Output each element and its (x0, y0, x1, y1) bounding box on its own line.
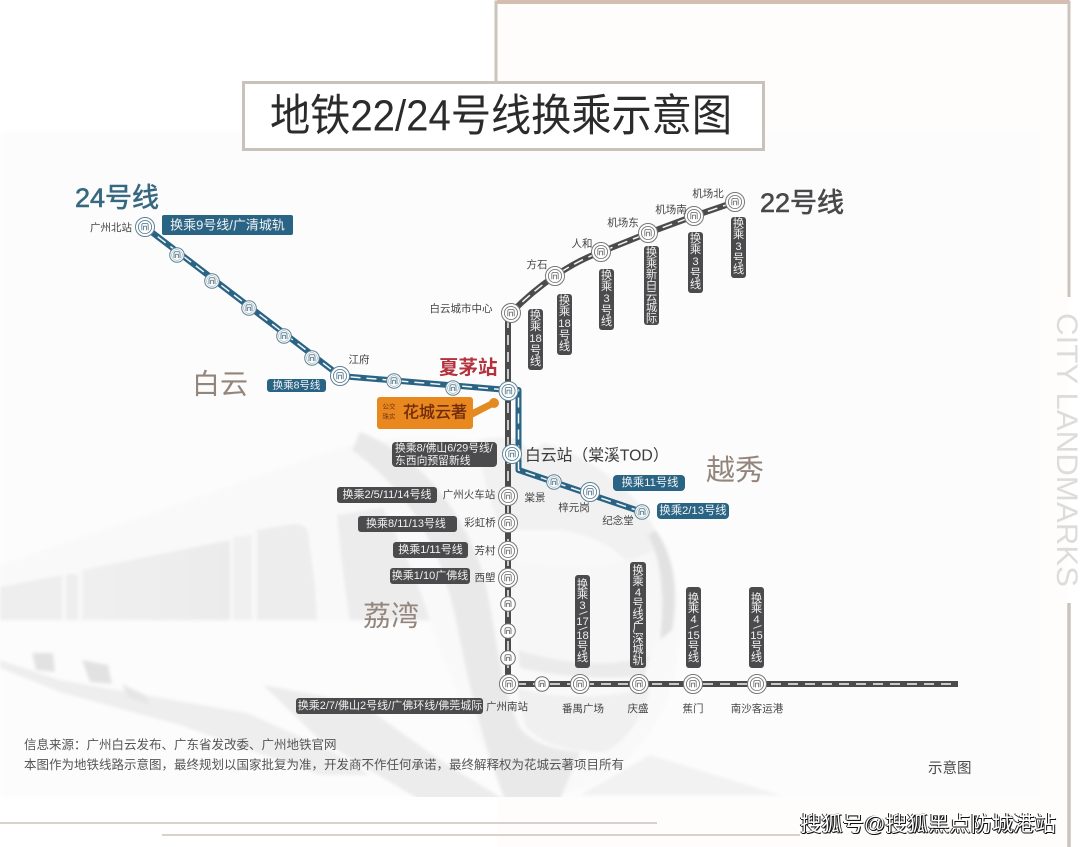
line 22 heading: 22号线 (760, 188, 844, 218)
grey horizontal transfer tags: 换乘1/10广佛线 (392, 568, 468, 582)
vertical transfer tags: line 22 north: 际 (646, 312, 657, 325)
station names: 白云城市中心 (430, 302, 493, 315)
vertical transfer tags: line 22 south: 线 (577, 650, 588, 664)
vertical transfer tags: line 22 south: 4 (635, 587, 641, 599)
grey horizontal transfer tags: 换乘2/7/佛山2号线/广佛环线/佛莞城际 (298, 698, 482, 712)
vertical transfer tags: line 22 south: 轨 (632, 653, 644, 667)
vertical transfer tags: line 22 north: 18 (558, 318, 571, 330)
grey horizontal transfer tags (296, 440, 497, 714)
background train illustration (0, 425, 780, 800)
station names: 广州北站 (90, 221, 132, 234)
vertical transfer tags: line 22 south: 17 (576, 616, 589, 628)
watermark: 搜狐号@搜狐黑点防城港站 (800, 812, 1056, 836)
line 24 stations (136, 218, 649, 519)
vertical transfer tags: line 22 south: 号 (577, 640, 588, 653)
vertical transfer tags: line 22 south: 线 (632, 607, 644, 621)
vertical transfer tags: line 22 north: 18 (529, 333, 542, 345)
station names: 纪念堂 (602, 514, 634, 527)
vertical transfer tags: line 22 south: 乘 (632, 574, 644, 588)
vertical transfer tags: line 22 south: 号 (632, 597, 644, 610)
source notes: 本图作为地铁线路示意图，最终规划以国家批复为准，开发商不作任何承诺，最终解释权为花城云著项目所有 (24, 757, 624, 772)
project marker: 花城云著 (403, 404, 467, 422)
project marker: 公交 (382, 402, 396, 410)
vertical transfer tags: line 22 north: 3 (603, 293, 610, 305)
grey horizontal transfer tags: 换乘2/5/11/14号线 (342, 487, 432, 501)
grey horizontal transfer tags: 换乘1/11号线 (398, 542, 463, 556)
teal transfer tags: 换乘11号线 (622, 475, 678, 489)
station names: 江府 (348, 353, 370, 366)
district labels: 越秀 (706, 454, 764, 487)
station names: 棠景 (524, 491, 546, 504)
grey horizontal transfer tags: 换乘8/11/13号线 (366, 516, 446, 530)
vertical transfer tags: line 22 north: 线 (559, 339, 570, 353)
vertical transfer tags: line 22 north: 号 (733, 252, 744, 265)
vertical transfer tags: line 22 south: / (577, 609, 589, 619)
project marker: 珠实 (382, 412, 396, 420)
grey horizontal transfer tags: 换乘8/佛山6/29号线/ (395, 440, 493, 454)
schematic note: 示意图 (928, 759, 972, 777)
station names: 芳村 (474, 544, 496, 557)
vertical transfer tags: line 22 south: / (751, 623, 763, 633)
grey horizontal transfer tags: 东西向预留新线 (395, 453, 471, 467)
vertical transfer tags: line 22 north: 3 (692, 256, 699, 268)
vertical transfer tags: line 22 north: 乘 (530, 319, 541, 333)
vertical transfer tags: line 22 south: 18 (576, 630, 589, 642)
vertical transfer tags: line 22 south: 15 (750, 630, 763, 642)
station names: 蕉门 (682, 702, 704, 715)
district labels: 白云 (192, 368, 248, 400)
vertical transfer tags: line 22 north: 号 (601, 304, 612, 317)
vertical transfer tags: line 22 south: 深 (632, 631, 644, 645)
vertical transfer tags: line 22 north: 乘 (690, 242, 701, 256)
vertical transfer tags: line 22 south: 换 (751, 593, 762, 605)
vertical transfer tags: line 22 south: 4 (690, 614, 697, 626)
line 22 track (508, 202, 958, 684)
vertical transfer tags: line 22 south: 换 (688, 593, 699, 605)
vertical transfer tags: line 22 north: 白 (646, 278, 657, 292)
vertical transfer tags: line 22 south: 15 (687, 630, 700, 642)
district labels: 荔湾 (363, 600, 419, 632)
Xiamao station label: 夏茅站 (439, 357, 498, 379)
station names: 广州火车站 (443, 488, 496, 501)
station names: 机场南 (655, 203, 687, 216)
vertical transfer tags: line 22 north: 乘 (646, 256, 657, 270)
vertical transfer tags: line 22 south: 4 (753, 614, 760, 626)
vertical transfer tags: line 22 north: 号 (690, 267, 701, 280)
interchange stations (499, 382, 522, 464)
title box (244, 82, 764, 150)
station names: 梓元岗 (558, 501, 590, 514)
vertical transfer tags: line 22 south: 换 (632, 565, 644, 577)
vertical transfer tags: line 22 north: 换 (646, 247, 657, 259)
line 22 stations (498, 192, 766, 694)
vertical transfer tags: line 22 north: 线 (530, 354, 541, 368)
vertical transfer tags: line 22 north: 3 (735, 241, 742, 253)
vertical transfer tags: line 22 south: / (632, 617, 644, 627)
title box: 地铁22/24号线换乘示意图 (270, 92, 732, 140)
vertical transfer tags: line 22 north: 换 (559, 295, 570, 307)
teal transfer tags: 换乘9号线/广清城轨 (170, 218, 285, 232)
vertical transfer tags: line 22 south (575, 562, 764, 668)
vertical transfer tags: line 22 north (528, 216, 746, 370)
station names: 机场北 (692, 187, 724, 200)
source notes (24, 737, 624, 772)
vertical transfer tags: line 22 north: 乘 (601, 279, 612, 293)
line 24 track (145, 227, 642, 512)
station names: 机场东 (607, 216, 639, 229)
vertical transfer tags: line 22 south: 换 (577, 579, 588, 591)
vertical transfer tags: line 22 north: 乘 (559, 304, 570, 318)
source notes: 信息来源：广州白云发布、广东省发改委、广州地铁官网 (24, 737, 337, 752)
station names: 西塱 (474, 571, 496, 584)
vertical transfer tags: line 22 north: 换 (601, 270, 612, 282)
vertical transfer tags: line 22 south: 广 (632, 621, 644, 634)
vertical transfer tags: line 22 north: 线 (601, 314, 612, 328)
project marker (377, 397, 499, 429)
station names (90, 187, 784, 715)
vertical transfer tags: line 22 north: 城 (646, 301, 657, 314)
vertical transfer tags: line 22 south: 乘 (688, 601, 699, 615)
vertical transfer tags: line 22 north: 换 (530, 310, 541, 322)
vertical transfer tags: line 22 south: 乘 (751, 601, 762, 615)
vertical transfer tags: line 22 south: 号 (751, 640, 762, 653)
district labels (192, 368, 764, 632)
teal transfer tags (162, 215, 729, 519)
vertical transfer tags: line 22 north: 乘 (733, 227, 744, 241)
vertical transfer tags: line 22 north: 换 (733, 218, 744, 230)
teal transfer tags: 换乘2/13号线 (659, 503, 727, 517)
station names: 庆盛 (628, 702, 648, 715)
teal transfer tags: 换乘8号线 (273, 378, 321, 392)
vertical transfer tags: line 22 south: 号 (688, 640, 699, 653)
vertical transfer tags: line 22 north: 线 (733, 262, 744, 276)
station names: 南沙客运港 (731, 702, 784, 715)
station names: 番禺广场 (562, 702, 604, 715)
vertical transfer tags: line 22 south: / (577, 624, 589, 634)
vertical transfer tags: line 22 north: 线 (690, 277, 701, 291)
vertical transfer tags: line 22 north: 号 (530, 344, 541, 357)
station names: 方石 (526, 258, 548, 271)
vertical transfer tags: line 22 south: 线 (688, 650, 699, 664)
vertical transfer tags: line 22 south: 线 (751, 650, 762, 664)
line 24 heading: 24号线 (75, 183, 159, 213)
station names: 彩虹桥 (464, 517, 496, 529)
station names: 广州南站 (486, 700, 528, 713)
vertical transfer tags: line 22 south: 3 (579, 600, 586, 612)
vertical transfer tags: line 22 north: 换 (690, 233, 701, 245)
vertical transfer tags: line 22 north: 号 (559, 329, 570, 342)
Baiyun station label: 白云站（棠溪TOD） (525, 446, 669, 464)
vertical transfer tags: line 22 south: / (688, 623, 700, 633)
vertical transfer tags: line 22 north: 新 (646, 267, 657, 281)
vertical transfer tags: line 22 south: 乘 (577, 587, 588, 601)
station names: 人和 (572, 238, 592, 250)
vertical transfer tags: line 22 south: 城 (632, 643, 644, 656)
vertical transfer tags: line 22 north: 云 (646, 291, 657, 303)
